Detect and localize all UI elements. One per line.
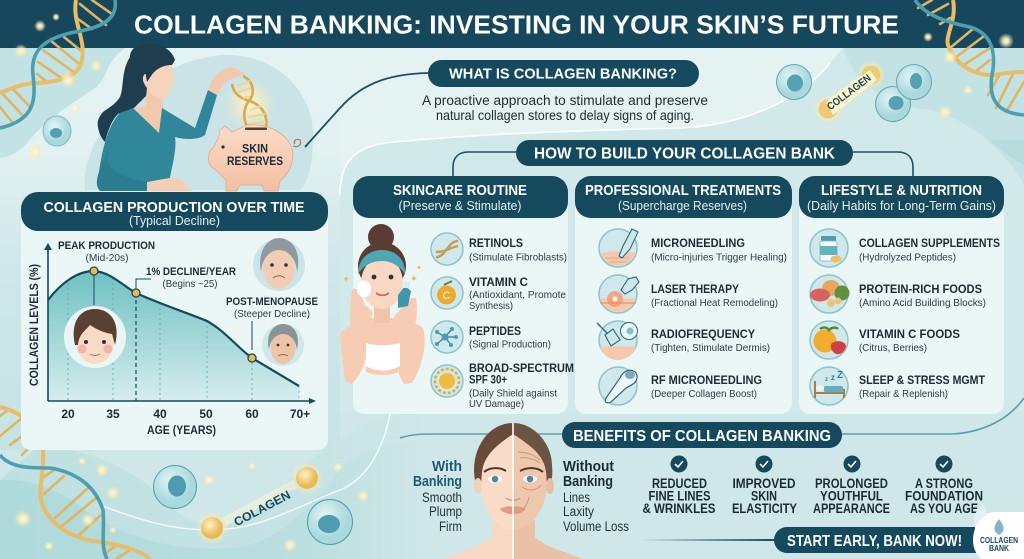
annotation: decline: (Begins ~25) xyxy=(162,278,218,290)
DNA: bottom left xyxy=(0,407,150,559)
axis tick labels: 20 xyxy=(61,407,75,421)
item: laser therapy: (Fractional Heat Remodeling) xyxy=(651,297,778,309)
face: oldest xyxy=(262,324,304,366)
annotation: decline: 1% DECLINE/YEAR xyxy=(146,266,236,278)
annotation: post-menopause: POST-MENOPAUSE xyxy=(226,296,318,308)
benefit: prolonged appearance xyxy=(813,456,890,516)
text: with banking: Banking xyxy=(413,473,462,490)
DNA: top left xyxy=(0,0,115,128)
axis tick labels: 70+ xyxy=(290,407,310,421)
logo badge xyxy=(973,503,1024,559)
benefit: strong foundation xyxy=(905,456,983,516)
column header: lifestyle: LIFESTYLE & NUTRITION xyxy=(821,183,982,199)
collagen capsule top right: COLLAGEN xyxy=(825,72,874,113)
DNA: top right xyxy=(915,0,1024,115)
annotation: post-menopause xyxy=(226,296,318,320)
benefit: improved elasticity xyxy=(732,456,797,516)
text: without banking: Volume Loss xyxy=(563,519,629,534)
item: retinols xyxy=(431,233,567,265)
chart header xyxy=(21,192,328,231)
item: sleep and stress: SLEEP & STRESS MGMT xyxy=(859,373,986,387)
column header: treatments xyxy=(575,176,792,218)
item: protein-rich foods: (Amino Acid Building Blocks) xyxy=(859,297,986,309)
logo badge: BANK xyxy=(989,544,1009,553)
benefit: strong foundation: FOUNDATION xyxy=(905,488,983,504)
item: vitamin c foods: VITAMIN C FOODS xyxy=(859,327,960,341)
title: COLLAGEN BANKING: INVESTING IN YOUR SKIN’S FUTURE xyxy=(134,12,899,40)
text: without banking: Laxity xyxy=(563,504,594,519)
annotation: peak: (Mid-20s) xyxy=(86,252,128,264)
pill: what is collagen banking: WHAT IS COLLAGEN BANKING? xyxy=(449,66,677,82)
collagen capsule bottom xyxy=(195,461,324,545)
benefit: reduced fine lines: & WRINKLES xyxy=(642,501,716,516)
axis tick labels: 35 xyxy=(106,407,120,421)
text: without banking: Lines xyxy=(563,490,590,505)
item: sleep and stress xyxy=(810,367,986,405)
item: peptides xyxy=(431,321,551,353)
chart header: COLLAGEN PRODUCTION OVER TIME xyxy=(44,199,304,216)
area chart xyxy=(44,243,316,404)
benefit: improved elasticity: ELASTICITY xyxy=(732,501,797,516)
item: spf: UV Damage) xyxy=(469,398,524,410)
item: radiofrequency: (Tighten, Stimulate Dermis) xyxy=(651,342,770,354)
item: protein-rich foods xyxy=(810,275,986,313)
text: with banking: With xyxy=(432,458,462,475)
item: collagen supplements xyxy=(810,229,1000,267)
logo badge: COLLAGEN xyxy=(980,536,1018,545)
item: spf: BROAD-SPECTRUM xyxy=(469,361,574,375)
panel: lifestyle and nutrition xyxy=(799,176,1004,414)
item: retinols: RETINOLS xyxy=(469,236,523,250)
item: microneedling xyxy=(599,229,787,267)
pill: how to build xyxy=(516,140,853,166)
face: older xyxy=(253,238,305,291)
chart header: (Typical Decline) xyxy=(129,214,220,228)
column header: treatments: (Supercharge Reserves) xyxy=(618,199,747,213)
text: with banking: Smooth xyxy=(422,490,462,505)
face: young xyxy=(64,306,126,368)
item: vitamin c: (Antioxidant, Promote xyxy=(469,289,566,301)
item: spf xyxy=(431,361,574,410)
illustration: skincare woman: ✦ xyxy=(342,274,350,284)
connector: what is xyxy=(305,73,428,147)
call to action: START EARLY, BANK NOW! xyxy=(787,533,962,550)
item: protein-rich foods: PROTEIN-RICH FOODS xyxy=(859,282,982,296)
axis tick labels: 40 xyxy=(153,407,167,421)
axis tick labels: 50 xyxy=(199,407,213,421)
illustration: woman and piggy bank xyxy=(85,44,313,191)
column header: skincare: SKINCARE ROUTINE xyxy=(393,183,527,199)
annotation: peak: PEAK PRODUCTION xyxy=(58,240,155,252)
column header: lifestyle: (Daily Habits for Long-Term Gains) xyxy=(807,199,996,213)
benefit: prolonged appearance: PROLONGED xyxy=(815,476,888,491)
pill: benefits heading xyxy=(562,422,842,448)
item: laser therapy: LASER THERAPY xyxy=(651,282,739,296)
column header: skincare xyxy=(353,176,568,218)
item: vitamin c: VITAMIN C xyxy=(469,275,528,289)
item: laser therapy xyxy=(599,275,778,313)
item: sleep and stress: Z xyxy=(837,370,843,381)
axis tick labels xyxy=(61,407,310,421)
illustration: before and after face xyxy=(445,423,582,559)
axis label: x: AGE (YEARS) xyxy=(147,423,216,437)
axis tick labels: 60 xyxy=(245,407,259,421)
illustration: skincare woman: ✦ xyxy=(416,264,422,272)
item: radiofrequency xyxy=(597,321,770,360)
item: vitamin c foods xyxy=(810,321,960,359)
illustration: skincare woman: ✦ xyxy=(410,274,418,285)
illustration: woman and piggy bank: RESERVES xyxy=(227,154,283,168)
item: collagen supplements: COLLAGEN SUPPLEMENTS xyxy=(859,236,1000,250)
panel: professional treatments xyxy=(575,176,792,414)
item: spf: (Daily Shield against xyxy=(469,388,557,400)
text block: definition: A proactive approach to stimulate and preserve xyxy=(422,92,708,108)
item: vitamin c: C xyxy=(443,290,451,302)
column header: lifestyle xyxy=(799,176,1004,218)
collagen capsule top right xyxy=(813,60,886,124)
axis label: y: COLLAGEN LEVELS (%) xyxy=(29,264,41,386)
annotation: decline xyxy=(146,266,236,290)
item: microneedling: MICRONEEDLING xyxy=(651,236,745,250)
benefit: improved elasticity: SKIN xyxy=(751,488,777,504)
item: rf microneedling: (Deeper Collagen Boost) xyxy=(651,388,757,400)
benefit: reduced fine lines: FINE LINES xyxy=(648,488,710,504)
item: peptides: (Signal Production) xyxy=(469,338,551,350)
pill: what is collagen banking xyxy=(428,60,699,87)
text: with banking: Plump xyxy=(429,504,462,519)
text: with banking: Firm xyxy=(439,519,462,534)
benefit: prolonged appearance: APPEARANCE xyxy=(813,501,890,516)
item: peptides: PEPTIDES xyxy=(469,324,521,338)
benefit: reduced fine lines: REDUCED xyxy=(652,476,707,491)
item: microneedling: (Micro-injuries Trigger Healing) xyxy=(651,252,787,264)
item: spf: SPF 30+ xyxy=(469,372,507,386)
item: sleep and stress: z xyxy=(831,373,835,382)
item: vitamin c: Synthesis) xyxy=(469,300,513,312)
illustration: skincare woman xyxy=(340,224,425,384)
item: rf microneedling xyxy=(599,367,762,405)
annotation: post-menopause: (Steeper Decline) xyxy=(234,308,310,320)
text block: definition: natural collagen stores to delay signs of aging. xyxy=(436,107,694,123)
connectors: how to build xyxy=(453,152,913,176)
item: vitamin c xyxy=(431,275,566,312)
item: retinols: (Stimulate Fibroblasts) xyxy=(469,252,567,264)
item: rf microneedling: RF MICRONEEDLING xyxy=(651,373,762,387)
item: vitamin c foods: (Citrus, Berries) xyxy=(859,342,927,354)
panel: skincare routine xyxy=(340,176,574,414)
illustration: woman and piggy bank: SKIN xyxy=(242,142,268,156)
text: without banking xyxy=(563,458,629,534)
panel: collagen production chart xyxy=(21,192,328,450)
pill: how to build: HOW TO BUILD YOUR COLLAGEN BANK xyxy=(534,146,836,162)
cells xyxy=(43,64,932,544)
column header: skincare: (Preserve & Stimulate) xyxy=(398,199,522,213)
text: without banking: Without xyxy=(563,458,614,475)
connector: benefits line xyxy=(400,398,1024,438)
benefit: improved elasticity: IMPROVED xyxy=(732,476,796,491)
annotation: peak xyxy=(58,240,155,264)
benefit: strong foundation: AS YOU AGE xyxy=(910,501,978,516)
item: sleep and stress: z xyxy=(825,377,828,383)
benefit: strong foundation: A STRONG xyxy=(915,476,973,491)
pill: benefits heading: BENEFITS OF COLLAGEN BANKING xyxy=(573,428,831,445)
benefit: prolonged appearance: YOUTHFUL xyxy=(820,488,883,504)
item: collagen supplements: (Hydrolyzed Peptides) xyxy=(859,252,956,264)
text: with banking xyxy=(413,458,462,534)
item: radiofrequency: RADIOFREQUENCY xyxy=(651,327,755,341)
call to action xyxy=(640,527,990,553)
header band xyxy=(0,0,1024,48)
text block: definition xyxy=(422,92,708,123)
benefit: reduced fine lines xyxy=(642,456,716,516)
text: without banking: Banking xyxy=(563,473,613,490)
item: sleep and stress: (Repair & Replenish) xyxy=(859,388,948,400)
column header: treatments: PROFESSIONAL TREATMENTS xyxy=(585,183,781,199)
collagen capsule bottom: COLAGEN xyxy=(231,488,293,529)
